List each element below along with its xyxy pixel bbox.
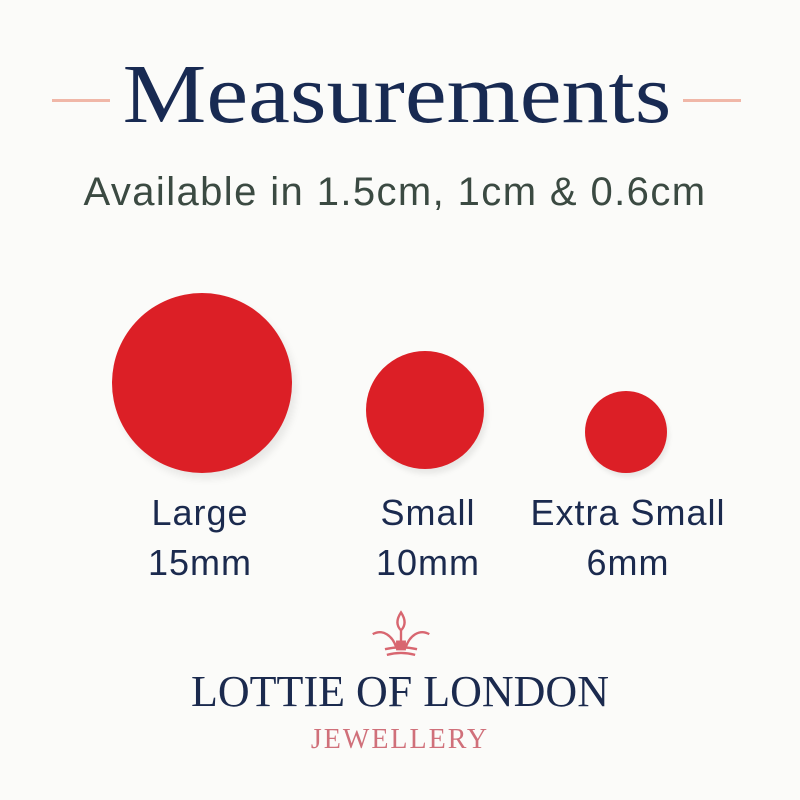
icon: crown xyxy=(372,610,430,656)
decorative line right xyxy=(683,99,741,102)
icon: extra small circle xyxy=(585,391,667,473)
icon: large circle xyxy=(112,293,292,473)
label: large xyxy=(148,492,252,583)
brand name: LOTTIE OF LONDON xyxy=(191,667,609,716)
label: extra small: 6mm xyxy=(586,542,670,583)
icon: small circle xyxy=(366,351,484,469)
label: small xyxy=(376,492,480,583)
label: extra small: Extra Small xyxy=(530,492,726,533)
decorative line left xyxy=(52,99,110,102)
label: large: 15mm xyxy=(148,542,252,583)
logo xyxy=(191,610,609,755)
title xyxy=(52,48,741,141)
heading text: Measurements xyxy=(123,48,671,141)
brand sub: JEWELLERY xyxy=(311,724,489,755)
subtitle: Available in 1.5cm, 1cm & 0.6cm xyxy=(84,170,706,214)
label: small: Small xyxy=(380,492,476,533)
label: large: Large xyxy=(151,492,249,533)
label: small: 10mm xyxy=(376,542,480,583)
label: extra small xyxy=(530,492,726,583)
